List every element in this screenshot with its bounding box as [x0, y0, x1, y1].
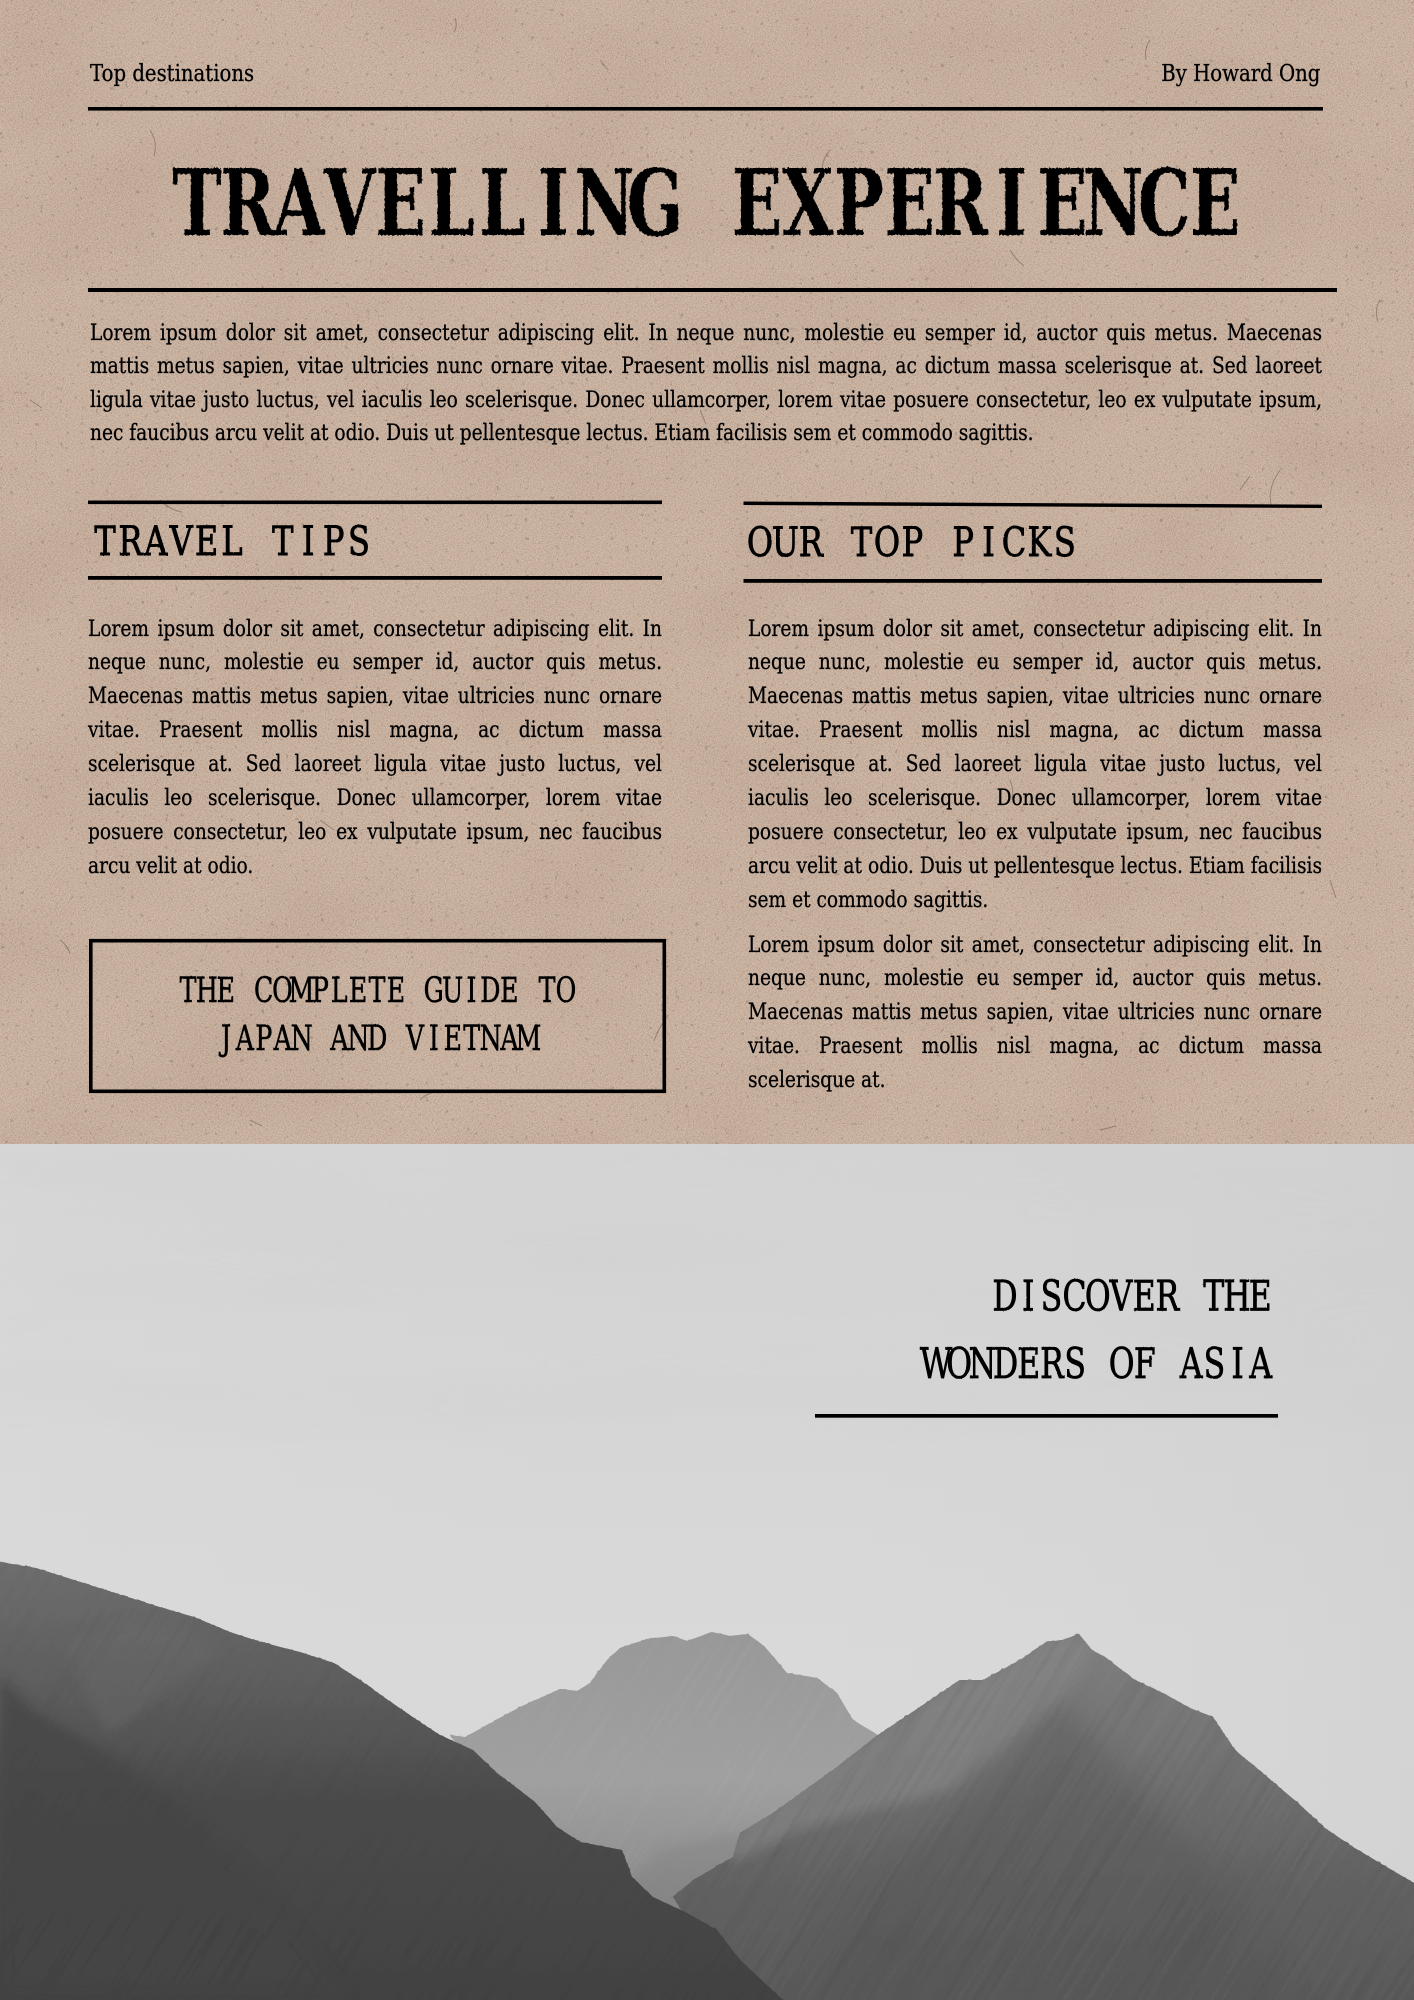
mountain: middle distant peak — [450, 1632, 878, 1910]
intro paragraph: mattis metus sapien, vitae ultricies nunc ornare vitae. Praesent mollis nisl magna, ac dictum massa scelerisque at. Sed laoreet — [90, 354, 1322, 379]
header rule — [88, 107, 1323, 111]
our top picks paragraph one: neque nunc, molestie eu semper id, auctor quis metus. — [748, 650, 1322, 675]
travel tips paragraph: scelerisque at. Sed laoreet ligula vitae justo luctus, vel — [88, 752, 662, 777]
banner heading: discover the wonders of asia — [815, 1271, 1278, 1418]
intro paragraph: ligula vitae justo luctus, vel iaculis leo scelerisque. Donec ullamcorper, lorem vitae posuere consectetur, leo ex vulputate ipsum, — [90, 388, 1322, 412]
travel tips paragraph: arcu velit at odio. — [88, 854, 253, 879]
callout: guide box — [91, 941, 664, 1091]
panel: grey sky background — [0, 1144, 1414, 2000]
our top picks paragraph one: sem et commodo sagittis. — [748, 888, 988, 913]
intro paragraph: nec faucibus arcu velit at odio. Duis ut pellentesque lectus. Etiam facilisis sem et commodo sagittis. — [90, 421, 1034, 446]
our top picks paragraph one — [748, 616, 1322, 913]
our top picks paragraph one: Lorem ipsum dolor sit amet, consectetur adipiscing elit. In — [748, 616, 1322, 642]
intro paragraph — [90, 320, 1322, 446]
callout: guide box: JAPAN AND VIETNAM — [218, 1019, 541, 1059]
title: TRAVELLING EXPERIENCE — [172, 149, 1240, 257]
our top picks paragraph two: Maecenas mattis metus sapien, vitae ultricies nunc ornare — [748, 1000, 1322, 1025]
panel: kraft paper background — [0, 0, 1414, 1144]
section heading: travel tips: TRAVEL TIPS — [94, 517, 370, 565]
header right text: By Howard Ong — [1161, 60, 1320, 86]
section heading: our top picks: OUR TOP PICKS — [747, 518, 1076, 566]
our top picks paragraph two: vitae. Praesent mollis nisl magna, ac dictum massa — [748, 1034, 1322, 1059]
mountain: right peak — [673, 1634, 1414, 2000]
banner heading: discover the wonders of asia: DISCOVER THE — [992, 1271, 1272, 1321]
our top picks paragraph two — [748, 932, 1322, 1093]
our top picks paragraph one: posuere consectetur, leo ex vulputate ipsum, nec faucibus — [748, 820, 1322, 845]
our top picks paragraph one: scelerisque at. Sed laoreet ligula vitae justo luctus, vel — [748, 752, 1322, 777]
title rule — [88, 288, 1337, 292]
our top picks paragraph one: vitae. Praesent mollis nisl magna, ac dictum massa — [748, 718, 1322, 743]
travel tips paragraph: vitae. Praesent mollis nisl magna, ac dictum massa — [88, 718, 662, 743]
our top picks paragraph two: Lorem ipsum dolor sit amet, consectetur adipiscing elit. In — [748, 932, 1322, 958]
travel tips paragraph: iaculis leo scelerisque. Donec ullamcorper, lorem vitae — [88, 786, 662, 811]
illustration: mountain range — [0, 1562, 1414, 2000]
travel tips paragraph: neque nunc, molestie eu semper id, auctor quis metus. — [88, 650, 662, 675]
our top picks paragraph one: Maecenas mattis metus sapien, vitae ultricies nunc ornare — [748, 684, 1322, 709]
mountain: left dark foreground ridge — [0, 1562, 783, 2000]
callout: guide box: THE COMPLETE GUIDE TO — [180, 971, 576, 1011]
our top picks paragraph two: neque nunc, molestie eu semper id, auctor quis metus. — [748, 966, 1322, 991]
our top picks paragraph one: iaculis leo scelerisque. Donec ullamcorper, lorem vitae — [748, 786, 1322, 811]
travel tips paragraph: Lorem ipsum dolor sit amet, consectetur adipiscing elit. In — [88, 616, 662, 642]
section heading: travel tips — [88, 500, 662, 580]
travel tips paragraph: posuere consectetur, leo ex vulputate ipsum, nec faucibus — [88, 820, 662, 845]
our top picks paragraph two: scelerisque at. — [748, 1068, 886, 1093]
banner heading: discover the wonders of asia: WONDERS OF ASIA — [920, 1338, 1273, 1388]
our top picks paragraph one: arcu velit at odio. Duis ut pellentesque lectus. Etiam facilisis — [748, 854, 1322, 879]
header left text: Top destinations — [90, 60, 254, 86]
intro paragraph: Lorem ipsum dolor sit amet, consectetur adipiscing elit. In neque nunc, molestie eu semper id, auctor quis metus. Maecenas — [90, 320, 1322, 346]
section heading: our top picks — [744, 502, 1322, 583]
travel tips paragraph — [88, 616, 662, 879]
travel tips paragraph: Maecenas mattis metus sapien, vitae ultricies nunc ornare — [88, 684, 662, 709]
